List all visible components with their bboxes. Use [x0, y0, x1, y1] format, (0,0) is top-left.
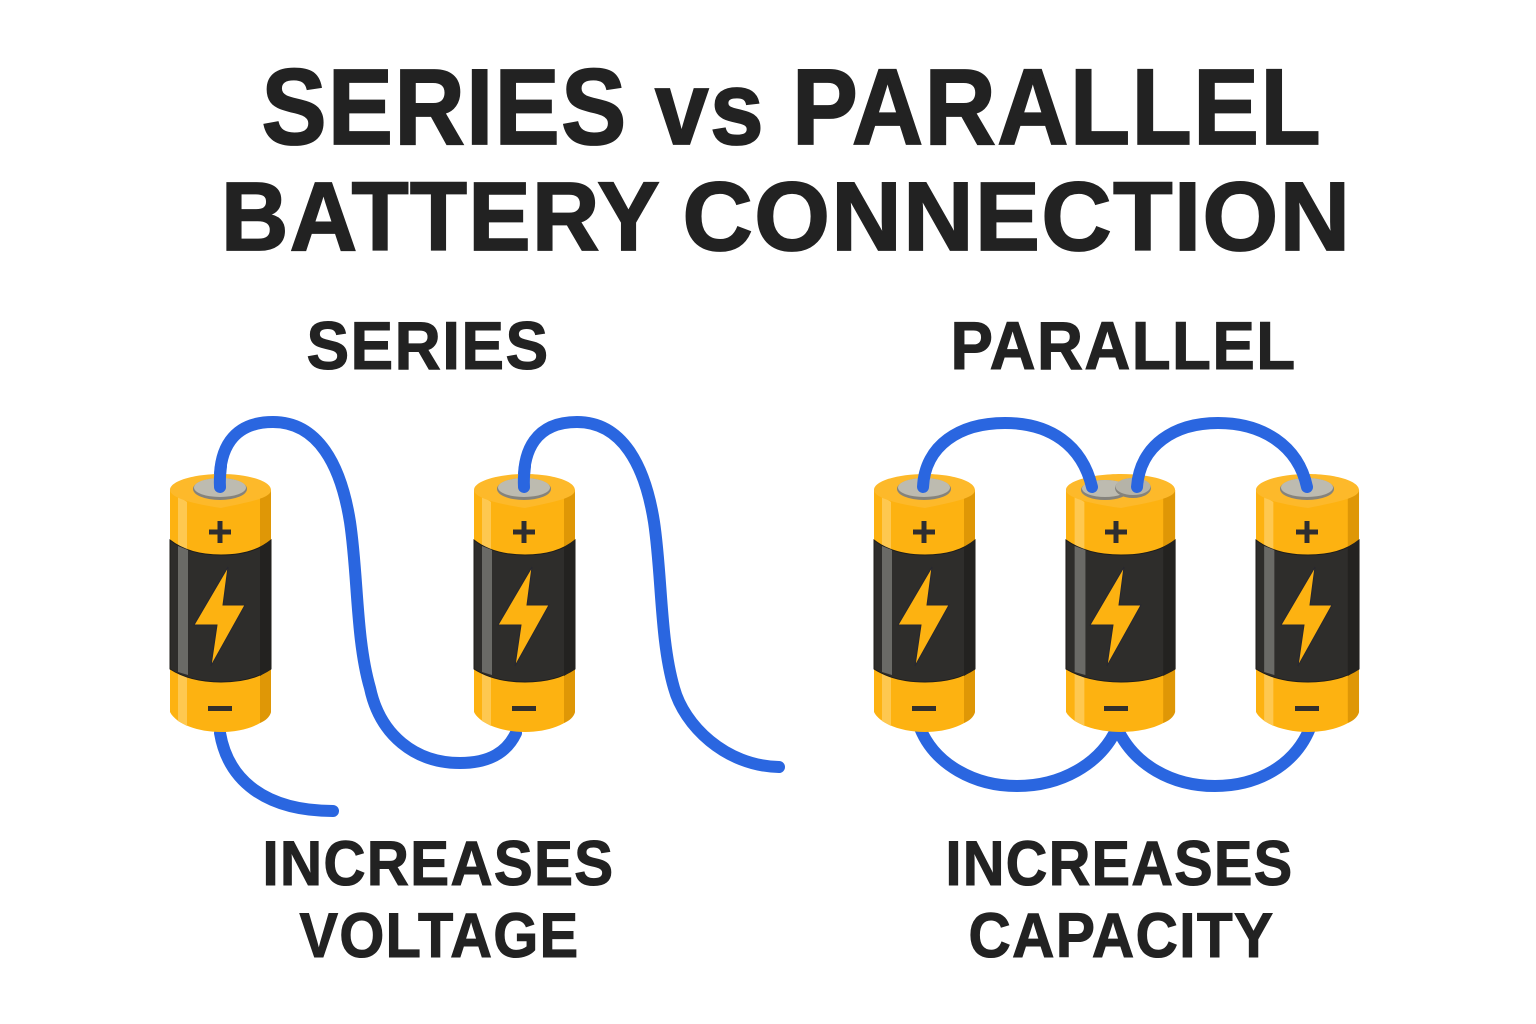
battery: series 1	[170, 474, 271, 732]
wires: parallel top	[923, 423, 1307, 487]
battery: series 2	[474, 474, 575, 732]
caption: increases voltage	[262, 829, 614, 971]
wire end: series 2	[524, 466, 525, 487]
title: PARALLEL	[792, 46, 1322, 167]
heading: series: SERIES	[306, 308, 550, 384]
battery: parallel 1	[874, 474, 975, 732]
caption: increases capacity: INCREASES	[946, 829, 1294, 899]
title: SERIES	[262, 46, 628, 167]
battery: parallel 3	[1256, 474, 1359, 732]
wire end: series 1	[220, 466, 221, 487]
panel: series	[170, 308, 779, 971]
heading: parallel: PARALLEL	[950, 308, 1296, 384]
battery: parallel 2	[1066, 474, 1175, 732]
caption: increases capacity: CAPACITY	[968, 901, 1274, 971]
wire: series lead	[220, 733, 333, 811]
title: CONNECTION	[682, 162, 1352, 271]
title: vs	[655, 51, 765, 167]
wire: series top wire 2	[524, 422, 779, 767]
wires: parallel bottom	[920, 728, 1310, 786]
caption: increases voltage: INCREASES	[262, 829, 614, 899]
caption: increases capacity	[946, 829, 1294, 971]
title	[221, 46, 1352, 271]
panel: parallel	[874, 308, 1359, 971]
title: BATTERY	[221, 162, 661, 271]
caption: increases voltage: VOLTAGE	[300, 901, 580, 971]
wire: series top wire 1	[220, 422, 516, 763]
